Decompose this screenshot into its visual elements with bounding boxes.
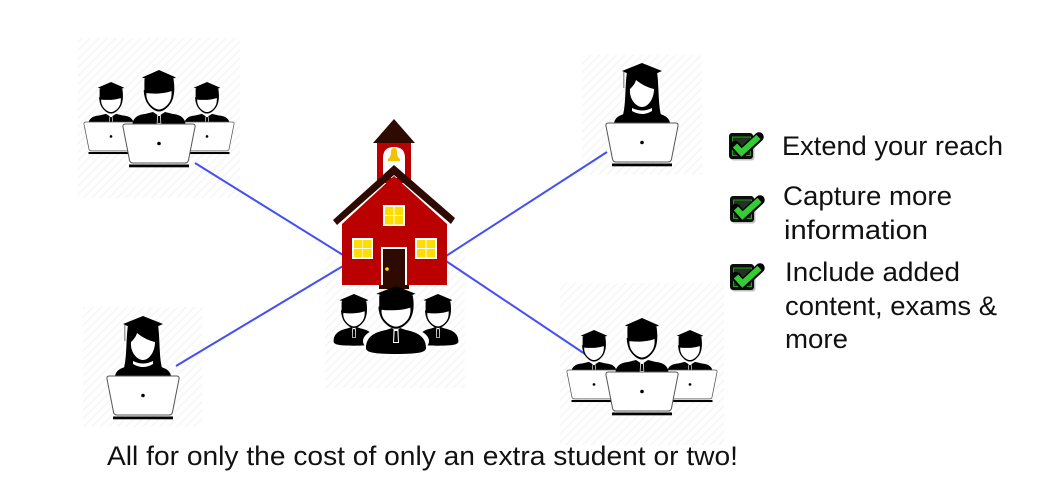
icon: check 2	[730, 196, 760, 224]
student group: bottom right	[567, 318, 717, 415]
student group: top left	[84, 70, 234, 167]
window: top	[383, 205, 405, 226]
window: right	[415, 238, 437, 259]
checklist	[729, 131, 1003, 354]
icon: bell	[388, 148, 400, 161]
item 3: more	[785, 324, 848, 354]
icon: check 1	[729, 133, 759, 160]
item 2	[783, 181, 952, 245]
schoolhouse	[333, 119, 455, 289]
footer caption: All for only the cost of only an extra student or two!	[107, 441, 738, 471]
door	[379, 247, 409, 289]
panel: center hatch	[325, 250, 465, 388]
graduates under school	[334, 286, 458, 356]
student: bottom left	[107, 316, 179, 419]
item 3	[785, 257, 997, 354]
window: left	[352, 238, 373, 259]
panel: bottom-right hatch	[560, 283, 724, 445]
item 3: Include added	[785, 257, 960, 287]
item 2: information	[784, 215, 928, 245]
icon: check 3	[730, 264, 760, 292]
belfry	[377, 143, 411, 183]
item 3: content, exams &	[785, 291, 997, 321]
panel: bottom-left hatch	[83, 307, 202, 427]
item 1: Extend your reach	[782, 131, 1003, 161]
connector lines	[176, 152, 607, 366]
panel: top-right hatch	[582, 55, 702, 175]
student: top right	[606, 63, 678, 166]
panel: top-left hatch	[78, 38, 240, 198]
item 2: Capture more	[783, 181, 952, 211]
